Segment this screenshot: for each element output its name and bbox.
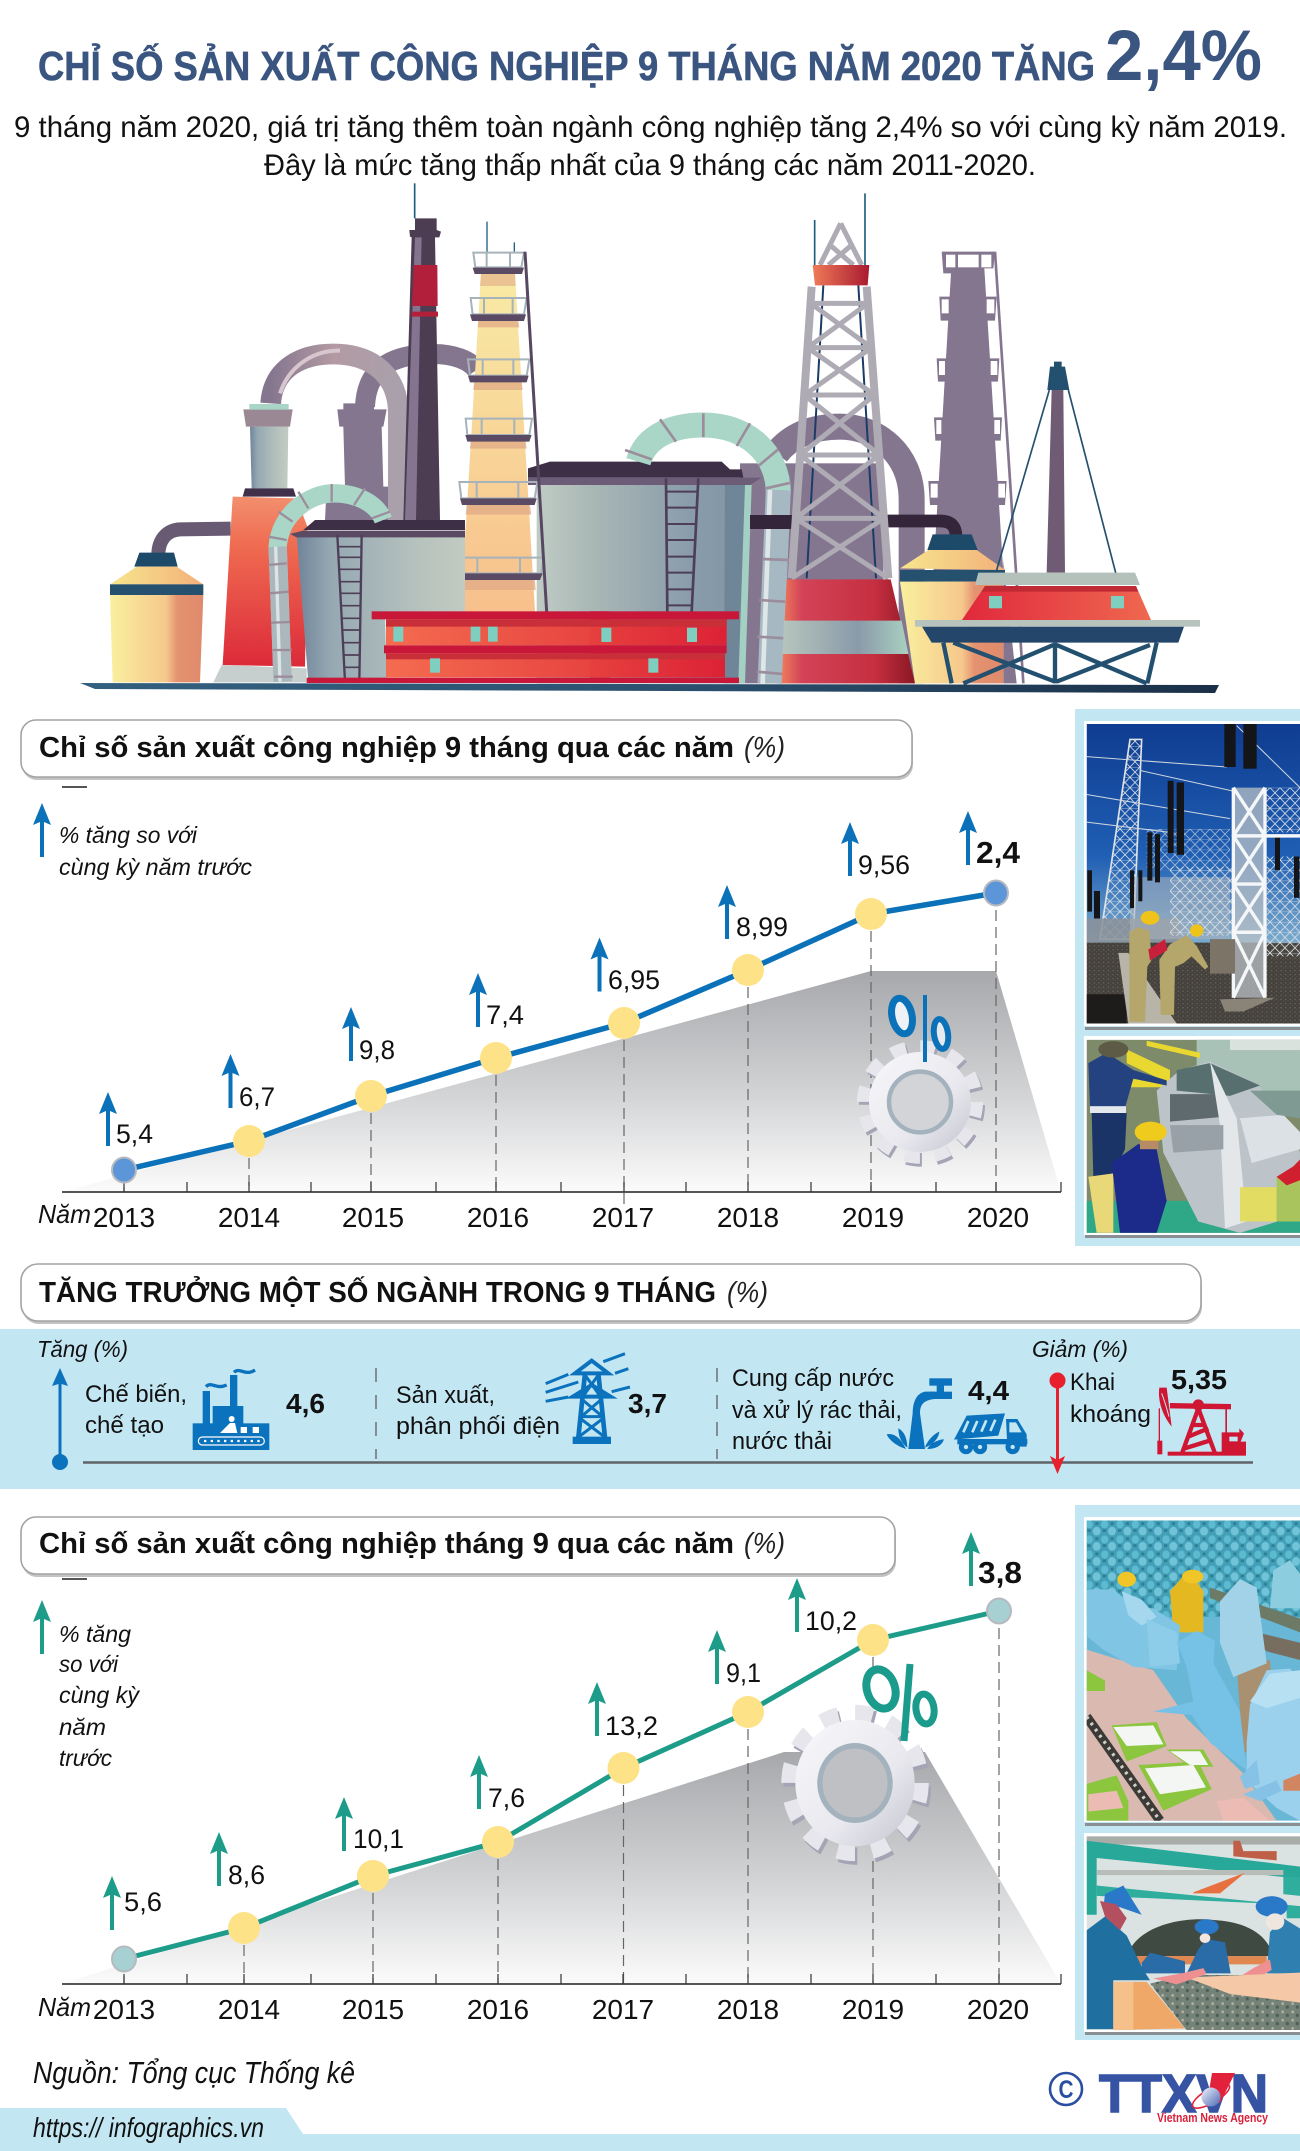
logo: TTXVN: C: [1058, 2076, 1074, 2104]
value labels: 8,6: [228, 1860, 265, 1890]
sector: water and waste: và xử lý rác thải,: [732, 1397, 902, 1424]
logo: TTXVN: TTXVN: [1099, 2064, 1268, 2124]
sector: mining: khoáng: [1070, 1401, 1151, 1428]
year axis labels: 2019: [842, 1994, 904, 2025]
value labels: 8,99: [736, 912, 788, 942]
legend: so với: [59, 1651, 119, 1677]
panel: photos bottom: [1075, 1505, 1300, 2040]
axis: [62, 893, 1061, 1204]
red furnace with grey stack: [223, 497, 307, 667]
legend: năm: [59, 1714, 106, 1740]
axis labels: Giảm (%): [1032, 1336, 1128, 1362]
value labels: 3,8: [978, 1555, 1022, 1590]
icon: oil pump: [1157, 1388, 1246, 1456]
left yellow tank with pipe: [158, 529, 231, 555]
website url: https:// infographics.vn: [33, 2112, 264, 2143]
year axis labels: 2014: [218, 1994, 280, 2025]
legend: [33, 1600, 141, 1771]
source: Nguồn: Tổng cục Thống kê: [33, 2055, 355, 2090]
value labels: 7,6: [488, 1783, 525, 1813]
icon: gear with percent: [789, 1664, 936, 1856]
year axis labels: 2018: [717, 1202, 779, 1233]
chart heading pill: (%): [744, 732, 785, 764]
value labels: 13,2: [605, 1711, 658, 1741]
icon: water tap: [887, 1378, 952, 1449]
chart heading pill: Chỉ số sản xuất công nghiệp tháng 9 qua các năm: [39, 1528, 734, 1560]
panel: photos top: [1075, 709, 1300, 1246]
photo: seafood processing line: [1087, 1520, 1300, 1821]
legend: cùng kỳ năm trước: [59, 854, 252, 880]
sector: electricity: phân phối điện: [396, 1413, 560, 1440]
section heading: sector growth: TĂNG TRƯỞNG MỘT SỐ NGÀNH TRONG 9 THÁNG: [39, 1275, 716, 1309]
value labels: 10,2: [805, 1606, 857, 1636]
chart heading pill: [21, 720, 913, 780]
sector: mining: [1070, 1364, 1246, 1456]
up arrows: [99, 811, 977, 1146]
title: 2,4%: [1105, 17, 1262, 96]
value labels: 9,56: [858, 850, 910, 880]
storage tank: [528, 462, 762, 683]
sector: electricity: 3,7: [628, 1388, 667, 1419]
value labels: 5,6: [124, 1887, 162, 1917]
legend: cùng kỳ: [59, 1682, 141, 1708]
sector: water and waste: 4,4: [968, 1375, 1009, 1406]
axis labels: Tăng (%): [37, 1336, 128, 1362]
red low building left: [386, 619, 610, 645]
derrick base: [782, 579, 915, 683]
value labels: 5,4: [116, 1119, 153, 1149]
up arrows: [103, 1532, 980, 1930]
year axis labels: 2015: [342, 1202, 404, 1233]
sector: processing and manufacturing: chế tạo: [85, 1412, 164, 1439]
year axis labels: 2015: [342, 1994, 404, 2025]
value labels: [116, 835, 1021, 1149]
red low building right: [590, 619, 727, 645]
year axis labels: Năm: [38, 1992, 91, 2022]
chart heading pill: Chỉ số sản xuất công nghiệp 9 tháng qua các năm: [39, 732, 734, 764]
panel: chart 9 months: [21, 720, 1061, 1233]
section heading: sector growth: (%): [727, 1277, 768, 1309]
sector: electricity: [396, 1354, 667, 1444]
sector: processing and manufacturing: [85, 1370, 325, 1450]
intro text: [14, 111, 1287, 182]
factory ground: [80, 683, 1219, 693]
data points: [112, 880, 1008, 1182]
section heading: sector growth: [21, 1264, 1202, 1324]
legend: % tăng so với: [59, 822, 198, 848]
year axis labels: [38, 1199, 1029, 1233]
legend: [33, 803, 252, 880]
title: [38, 17, 1262, 96]
title: CHỈ SỐ SẢN XUẤT CÔNG NGHIỆP 9 THÁNG NĂM 2020 TĂNG: [38, 43, 1095, 89]
front steel tank: [297, 535, 465, 682]
year axis labels: 2016: [467, 1994, 529, 2025]
small mint pipe: [278, 493, 383, 682]
sector: processing and manufacturing: 4,6: [286, 1388, 325, 1419]
year axis labels: 2017: [592, 1202, 654, 1233]
data points: [112, 1598, 1011, 1972]
trend line: [124, 1611, 999, 1959]
chart heading pill: [21, 1517, 896, 1577]
footer band: [0, 2108, 1300, 2151]
icon: factory: [193, 1370, 269, 1450]
large mint pipe: [638, 425, 778, 493]
trend line: [124, 893, 996, 1170]
year axis labels: [38, 1992, 1029, 2025]
yellow platform chimney: [461, 273, 535, 612]
year axis labels: 2020: [967, 1994, 1029, 2025]
year axis labels: Năm: [38, 1199, 91, 1229]
intro text: Đây là mức tăng thấp nhất của 9 tháng các năm 2011-2020.: [264, 149, 1036, 182]
axis: [62, 1611, 1061, 1984]
photo: car assembly: [1087, 1040, 1300, 1233]
photo: substation workers: [1087, 724, 1300, 1024]
sector: water and waste: nước thải: [732, 1428, 832, 1455]
year axis labels: 2014: [218, 1202, 280, 1233]
value labels: 9,1: [726, 1658, 761, 1688]
value labels: 9,8: [359, 1035, 395, 1065]
icon: dump truck: [954, 1413, 1027, 1452]
offshore platform with mast: [997, 390, 1049, 570]
year axis labels: 2016: [467, 1202, 529, 1233]
tall dark chimney: [271, 354, 398, 520]
area under line: [62, 1752, 1061, 1984]
chart heading pill: (%): [744, 1528, 785, 1560]
sector: water and waste: Cung cấp nước: [732, 1365, 894, 1392]
legend: % tăng: [59, 1621, 131, 1647]
year axis labels: 2018: [717, 1994, 779, 2025]
sector: mining: 5,35: [1171, 1364, 1227, 1395]
sector: mining: Khai: [1070, 1369, 1115, 1396]
logo: TTXVN: Vietnam News Agency: [1157, 2111, 1268, 2125]
panel: chart month 9: [21, 1517, 1061, 2025]
photo: waste sorting workers: [1087, 1836, 1300, 2030]
panel: sector growth band: [0, 1329, 1300, 1489]
factory illustration: [80, 183, 1219, 693]
oil derrick: [792, 193, 888, 578]
up axis arrow: [52, 1368, 68, 1470]
background silhouette structures: [740, 252, 1023, 683]
value labels: [124, 1555, 1022, 1917]
year axis labels: 2019: [842, 1202, 904, 1233]
value labels: 2,4: [976, 835, 1021, 870]
sector: water and waste: [732, 1365, 1027, 1455]
down axis arrow: [1050, 1372, 1066, 1474]
year axis labels: 2017: [592, 1994, 654, 2025]
intro text: 9 tháng năm 2020, giá trị tăng thêm toàn ngành công nghiệp tăng 2,4% so với cùng kỳ năm 2019.: [14, 111, 1287, 144]
dark pipe: [750, 515, 797, 529]
year axis labels: 2020: [967, 1202, 1029, 1233]
value labels: 6,7: [239, 1082, 275, 1112]
sector: processing and manufacturing: Chế biến,: [85, 1381, 187, 1408]
year axis labels: 2013: [93, 1202, 155, 1233]
year axis labels: 2013: [93, 1994, 155, 2025]
value labels: 7,4: [486, 1000, 524, 1030]
value labels: 6,95: [608, 965, 660, 995]
right yellow tank: [927, 534, 978, 550]
axis labels: [37, 1336, 1128, 1362]
area under line: [62, 971, 1061, 1192]
sector: electricity: Sản xuất,: [396, 1382, 495, 1409]
legend: trước: [59, 1745, 112, 1771]
value labels: 10,1: [353, 1824, 404, 1854]
icon: power tower: [546, 1354, 630, 1444]
icon: gear with percent: [864, 995, 978, 1160]
